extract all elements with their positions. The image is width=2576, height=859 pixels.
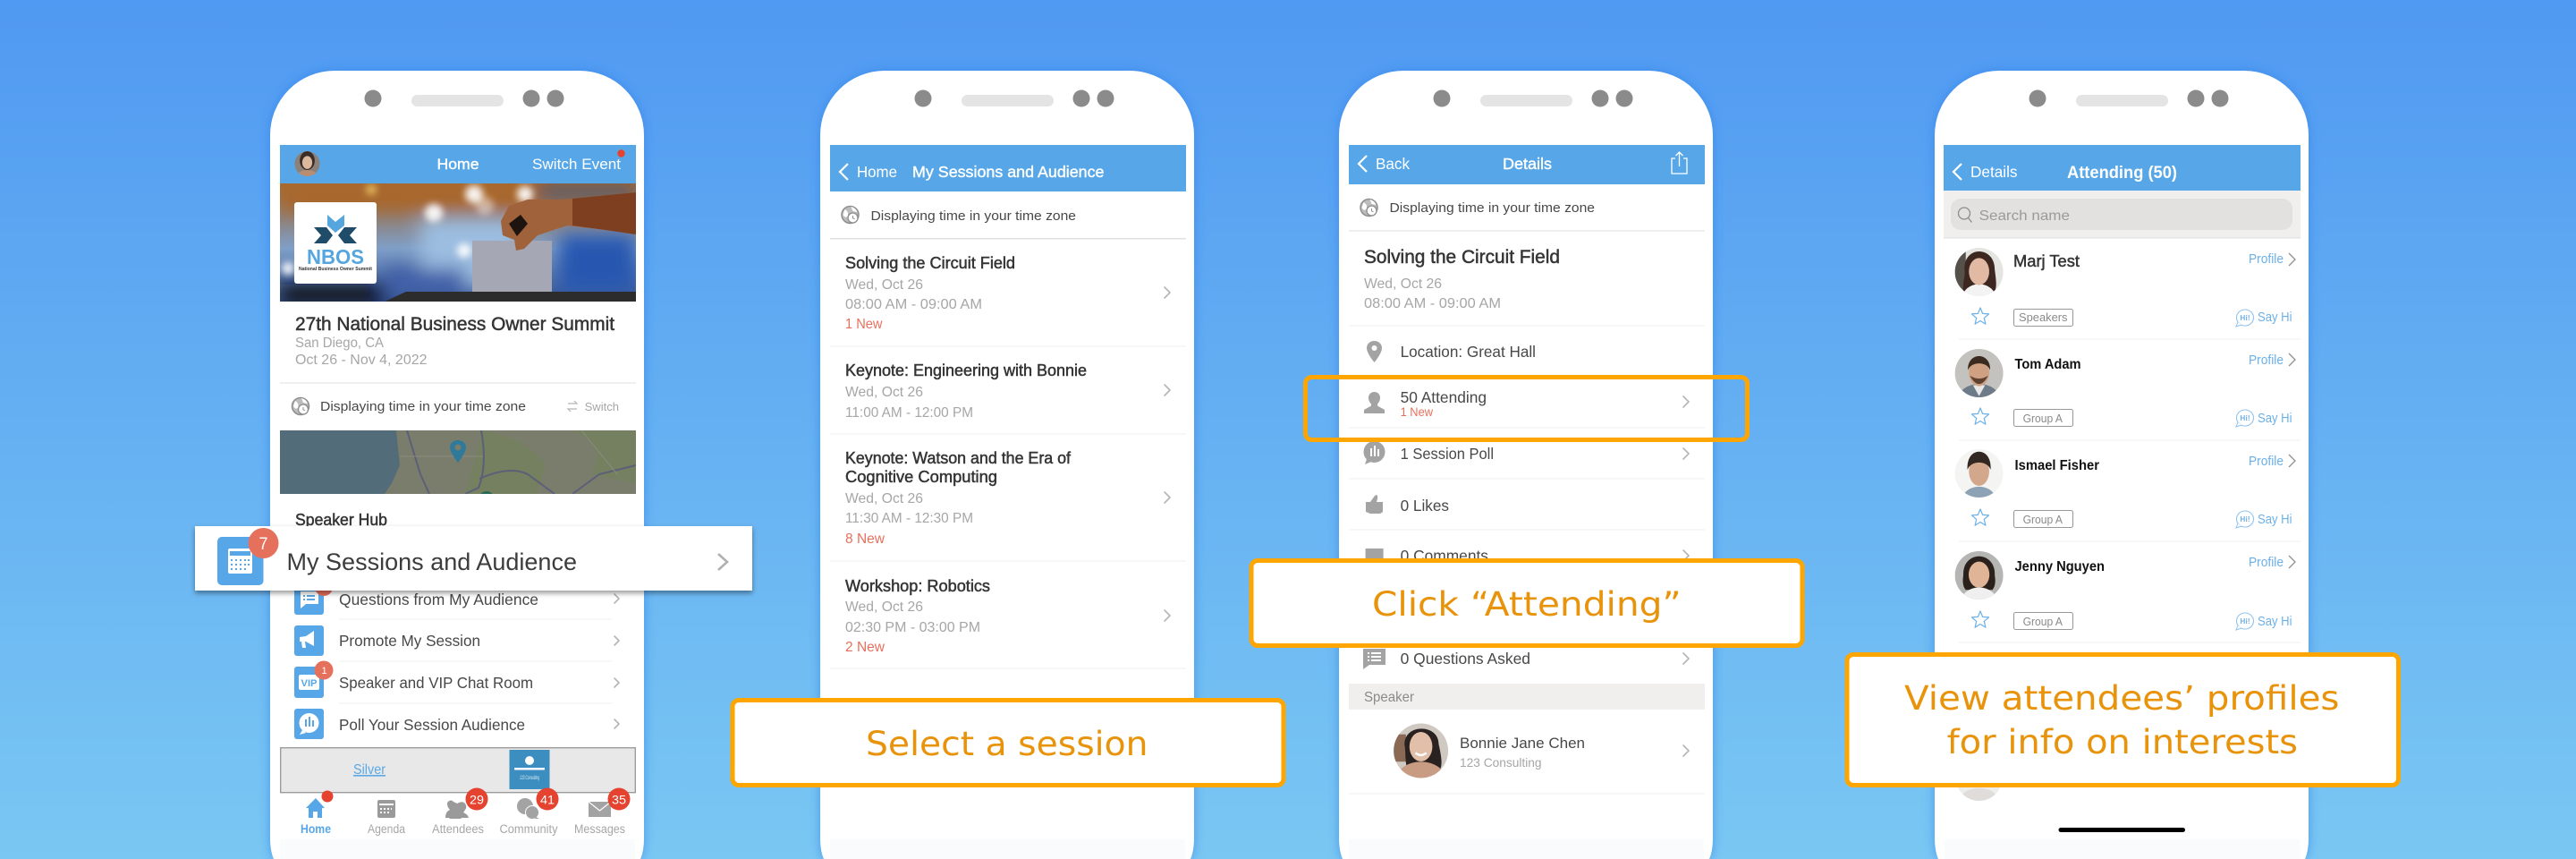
tab: community: Community: [499, 822, 558, 836]
back chevron: [840, 164, 848, 180]
back label: Details: [1970, 163, 2018, 181]
attendee: Ismael Fisher: Profile: [2249, 454, 2284, 469]
header bar: details: [1349, 145, 1705, 184]
attendee: Tom Adam: Profile: [2249, 353, 2284, 368]
section band: Speaker: Speaker: [1364, 690, 1415, 705]
icon: time zone globe: [1360, 199, 1377, 217]
header title: Details: [1503, 155, 1552, 173]
session title: Solving the Circuit Field: [1364, 247, 1560, 268]
row: questions asked: [1363, 649, 1689, 669]
home indicator: [2059, 828, 2185, 832]
badge: 7: 7: [259, 535, 268, 554]
icon: switch arrows: [568, 401, 577, 412]
time zone notice: Displaying time in your time zone: [871, 209, 1076, 224]
attendee: Jenny Nguyen: Group A: [2023, 615, 2063, 628]
chevron: [614, 719, 619, 728]
search bar: [1944, 191, 2301, 238]
session: Solving the Circuit Field: 08:00 AM - 09:00 AM: [845, 297, 982, 312]
time zone notice: Displaying time in your time zone: [320, 400, 526, 414]
callout: Click Attending: Click “Attending”: [1372, 585, 1682, 624]
session: Workshop: Robotics: 2 New: [845, 640, 885, 655]
badge: 1: [315, 660, 333, 680]
attendee: Tom Adam: Group A: [2023, 412, 2063, 425]
session: Workshop: Robotics: 02:30 PM - 03:00 PM: [845, 620, 980, 635]
session date: Wed, Oct 26: [1364, 276, 1442, 292]
session: Workshop: Robotics: [845, 577, 1170, 655]
phone 1: home screen: [195, 71, 752, 859]
session: Keynote: Watson: 8 New: [845, 532, 885, 547]
row: questions: Questions from My Audience: [339, 591, 538, 608]
header title: My Sessions and Audience: [912, 163, 1104, 181]
phone frame 1: [270, 71, 644, 859]
card label: My Sessions and Audience: [286, 549, 577, 575]
phone frame 4: [1935, 71, 2309, 859]
session: Keynote: Engineering with Bonnie: Keynote: Engineering with Bonnie: [845, 361, 1087, 379]
session: Keynote: Watson: 11:30 AM - 12:30 PM: [845, 511, 973, 526]
row: likes: 0 Likes: [1401, 497, 1449, 515]
row: session poll: [1363, 441, 1689, 464]
tab bar: [301, 787, 630, 836]
session: Keynote: Engineering with Bonnie: [845, 361, 1170, 421]
row: comments: 0 Comments: [1401, 547, 1488, 565]
row: attending: 50 Attending: [1401, 388, 1487, 406]
avatar: Jenny Nguyen: [1955, 551, 2004, 600]
callout: View attendees profiles: View attendees’ profiles: [1904, 679, 2340, 718]
callout: View attendees profiles: for info on interests: [1947, 723, 2298, 761]
session time: 08:00 AM - 09:00 AM: [1364, 296, 1501, 311]
header bar: home: [280, 145, 636, 185]
list: speaker hub rows: [294, 578, 619, 739]
NBOS logo card: [294, 202, 377, 284]
attendee: Jenny Nguyen: Jenny Nguyen: [2014, 559, 2105, 574]
session: Solving the Circuit Field: Solving the Circuit Field: [845, 254, 1015, 272]
avatar: user: [295, 151, 320, 176]
event title: 27th National Business Owner Summit: [295, 314, 614, 335]
attendee: Jenny Nguyen: Profile: [2249, 555, 2284, 570]
attendee: Ismael Fisher: Group A: [2023, 513, 2063, 526]
phone frame 3: [1339, 71, 1713, 859]
avatar: Bonnie Jane Chen: [1394, 723, 1448, 778]
chevron: [718, 554, 727, 570]
badge: 1: 1: [322, 666, 327, 676]
header title: Home: Home: [436, 156, 479, 173]
phone 2: session list: [820, 71, 1194, 859]
notification dot: [617, 149, 625, 157]
row: attending: [1364, 388, 1689, 419]
speaker row: [1394, 723, 1690, 778]
session: Keynote: Watson: [845, 449, 1170, 547]
tab: home: Home: [301, 822, 331, 836]
sponsor bar: Silver: [353, 762, 386, 778]
tab: attendees: [432, 787, 488, 836]
badge hidden: questions: [315, 578, 333, 596]
icon: VIP: [294, 667, 324, 698]
row: location: Location: Great Hall: [1401, 343, 1536, 361]
icon: questions: [294, 583, 324, 615]
row: attending: 1 New: [1401, 405, 1433, 419]
icon: share: [1672, 152, 1687, 174]
session: Solving the Circuit Field: Wed, Oct 26: [845, 277, 923, 293]
icon: time zone globe: [842, 206, 859, 224]
row: questions asked: 0 Questions Asked: [1401, 650, 1530, 668]
chevron: [614, 594, 619, 603]
tab: agenda: Agenda: [368, 822, 405, 836]
switch link: Switch: [585, 400, 619, 413]
tab: community: [499, 787, 558, 836]
avatar: Ismael Fisher: [1955, 449, 2004, 498]
section heading: Speaker Hub: Speaker Hub: [295, 511, 387, 529]
header link: Switch Event: Switch Event: [532, 156, 621, 173]
avatar: Tom Adam: [1955, 349, 2004, 397]
back label: Back: [1376, 155, 1410, 173]
highlight card: My Sessions and Audience: [195, 526, 752, 591]
attendee: Marj Test: Marj Test: [2013, 252, 2080, 270]
session: Solving the Circuit Field: 1 New: [845, 317, 883, 332]
row: comments: [1366, 547, 1689, 565]
session: Keynote: Engineering with Bonnie: 11:00 AM - 12:00 PM: [845, 405, 973, 421]
tab: messages: [574, 787, 630, 836]
tab: agenda: [368, 800, 405, 836]
callout: Select a session: Select a session: [866, 725, 1148, 763]
session: Workshop: Robotics: Workshop: Robotics: [845, 577, 990, 595]
attendee: Tom Adam: Tom Adam: [2014, 357, 2080, 372]
attendee: Jenny Nguyen: Say Hi: [2258, 614, 2292, 629]
attendee: Tom Adam: [1955, 349, 2295, 427]
attendee: Marj Test: Speakers: [2019, 310, 2068, 324]
chevron: [614, 636, 619, 645]
event location: San Diego, CA: [295, 336, 385, 351]
attendee: Jenny Nguyen: [1955, 551, 2295, 630]
row: poll: Poll Your Session Audience: [339, 716, 525, 734]
icon: time zone globe: [292, 397, 309, 415]
icon: promote: [294, 625, 324, 656]
row: VIP chat: Speaker and VIP Chat Room: [339, 674, 533, 692]
back chevron: [1359, 156, 1367, 172]
icon: calendar: [217, 537, 263, 585]
callout: Select a session: [733, 700, 1284, 786]
screen white 1: [280, 183, 636, 839]
phone 4: attendee list: [1935, 71, 2309, 859]
attendee: Ismael Fisher: Ismael Fisher: [2014, 458, 2099, 473]
event dates: Oct 26 - Nov 4, 2022: [295, 353, 428, 368]
header bar: attending: [1944, 145, 2301, 191]
attendee: Marj Test: [1955, 248, 2295, 327]
attendee: Ismael Fisher: Say Hi: [2258, 512, 2292, 527]
chevron: [614, 678, 619, 687]
row: likes: [1366, 495, 1449, 515]
section band: Speaker: [1349, 684, 1705, 710]
header bar: sessions: [830, 145, 1186, 191]
search bar: Search name: [1979, 208, 2070, 224]
time zone notice: Displaying time in your time zone: [1390, 201, 1595, 216]
attendee: Marj Test: Say Hi: [2258, 310, 2292, 325]
sponsor bar: 123 Consulting: [520, 776, 539, 781]
icon: VIP: VIP: [301, 678, 317, 689]
tab: attendees: Attendees: [432, 822, 484, 836]
phone 3: session details: [1339, 71, 1713, 859]
speaker row: Bonnie Jane Chen: [1460, 735, 1585, 752]
attendee: Ismael Fisher: [1955, 449, 2295, 528]
header title: Attending (50): [2067, 164, 2177, 183]
attendee: Marj Test: Profile: [2249, 251, 2284, 267]
speaker row: 123 Consulting: [1460, 755, 1542, 770]
tab: community: 41: [540, 793, 555, 807]
venue map: [280, 430, 636, 494]
row: promote: Promote My Session: [339, 632, 480, 650]
tab: messages: 35: [612, 793, 626, 807]
attendee: Tom Adam: Say Hi: [2258, 411, 2292, 426]
session: Solving the Circuit Field: [845, 254, 1170, 332]
avatar: partly hidden attendee: [1958, 787, 2000, 801]
badge: 7: [249, 528, 279, 558]
NBOS logo card: National Business Owner Summit: [299, 267, 372, 272]
row: session poll: 1 Session Poll: [1401, 445, 1494, 463]
session: Keynote: Watson: Cognitive Computing: [845, 468, 997, 486]
session: Keynote: Watson: Wed, Oct 26: [845, 491, 923, 506]
icon: poll: [294, 709, 324, 739]
row: location: [1367, 341, 1536, 362]
session: Keynote: Watson: Keynote: Watson and the Era of: [845, 449, 1072, 467]
event banner image: [280, 183, 636, 304]
callout highlight: attending row: [1306, 378, 1748, 440]
session: Keynote: Engineering with Bonnie: Wed, Oct 26: [845, 385, 923, 400]
session: Workshop: Robotics: Wed, Oct 26: [845, 600, 923, 615]
back chevron: [1953, 164, 1962, 180]
NBOS logo card: NBOS: [307, 245, 364, 268]
back label: Home: [857, 163, 897, 181]
tab: home: [301, 791, 333, 836]
phone frame 2: [820, 71, 1194, 859]
callout: View attendees profiles: [1847, 655, 2399, 786]
tab: attendees: 29: [470, 793, 484, 807]
sponsor bar: [281, 748, 635, 793]
avatar: Marj Test: [1955, 248, 2004, 296]
callout: Click Attending: [1251, 560, 1802, 646]
tab: messages: Messages: [574, 822, 625, 836]
